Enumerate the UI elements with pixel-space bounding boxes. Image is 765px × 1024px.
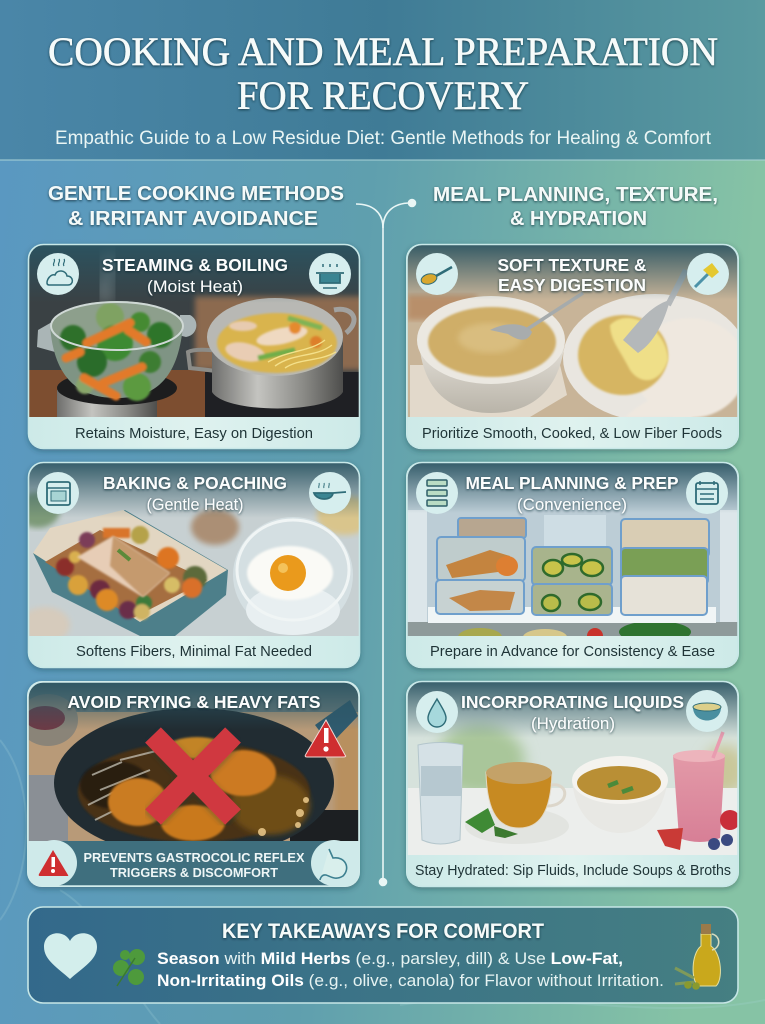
takeaway text: Non-Irritating Oils (e.g., olive, canola) for Flavor without Irritation. bbox=[157, 972, 664, 990]
photo: steamer and pot bbox=[29, 245, 365, 418]
card title: STEAMING & BOILING bbox=[102, 255, 288, 275]
caption: Prepare in Advance for Consistency & Ease bbox=[430, 643, 715, 660]
icon: pan bbox=[309, 472, 351, 514]
heading: KEY TAKEAWAYS FOR COMFORT bbox=[222, 920, 544, 943]
caption: Stay Hydrated: Sip Fluids, Include Soups & Broths bbox=[415, 862, 731, 879]
title bbox=[48, 29, 718, 118]
icon: steam cloud bbox=[37, 253, 79, 295]
card title bbox=[461, 692, 684, 733]
takeaway text: Season with Mild Herbs (e.g., parsley, dill) & Use Low-Fat, bbox=[157, 950, 623, 968]
panel: key takeaways bbox=[28, 907, 738, 1003]
photo: frying pan bbox=[28, 683, 358, 841]
card title: AVOID FRYING & HEAVY FATS bbox=[68, 692, 320, 712]
card title bbox=[466, 473, 679, 514]
icon: oven bbox=[37, 472, 79, 514]
card title: EASY DIGESTION bbox=[498, 275, 646, 295]
containers bbox=[436, 518, 709, 615]
icon: warning lower bbox=[39, 850, 68, 876]
heading: right column: & HYDRATION bbox=[510, 207, 647, 230]
header band bbox=[0, 0, 765, 161]
card title bbox=[102, 255, 288, 296]
panel: avoid frying bbox=[18, 681, 360, 887]
icon: water drop bbox=[416, 691, 458, 733]
warning text: TRIGGERS & DISCOMFORT bbox=[110, 865, 278, 880]
panel: incorporating liquids bbox=[406, 681, 747, 887]
panel: soft texture bbox=[406, 244, 747, 449]
panel: steaming and boiling bbox=[28, 244, 365, 449]
card title: INCORPORATING LIQUIDS bbox=[461, 692, 684, 712]
card title: (Convenience) bbox=[517, 496, 627, 514]
photo: baked dish and poached egg bbox=[29, 473, 359, 636]
icon: fork bbox=[687, 253, 729, 295]
warning text bbox=[84, 850, 305, 880]
caption: Prioritize Smooth, Cooked, & Low Fiber Foods bbox=[422, 425, 722, 442]
icon: red cross bbox=[153, 735, 233, 817]
icon: heart bbox=[44, 933, 97, 979]
warning text: PREVENTS GASTROCOLIC REFLEX bbox=[84, 850, 305, 865]
card title bbox=[498, 255, 647, 295]
caption: Retains Moisture, Easy on Digestion bbox=[75, 425, 313, 442]
photo: fridge containers bbox=[408, 472, 738, 636]
heading: left column bbox=[48, 182, 344, 230]
card title: SOFT TEXTURE & bbox=[498, 255, 647, 275]
card title: BAKING & POACHING bbox=[103, 473, 287, 493]
takeaway text bbox=[157, 950, 664, 990]
card title: (Moist Heat) bbox=[147, 278, 243, 296]
photo: drinks and soup bbox=[408, 704, 738, 855]
heading: left column: GENTLE COOKING METHODS bbox=[48, 182, 344, 205]
card title bbox=[103, 473, 287, 514]
icon: olive oil bottle bbox=[675, 924, 720, 990]
icon: stomach bbox=[320, 849, 347, 880]
icon: pot bbox=[309, 253, 351, 295]
icon: calendar bbox=[686, 472, 728, 514]
card title: (Hydration) bbox=[531, 715, 615, 733]
icon: warning upper bbox=[305, 720, 346, 757]
heading: left column: & IRRITANT AVOIDANCE bbox=[68, 207, 318, 230]
title: FOR RECOVERY bbox=[237, 73, 529, 118]
caption: Softens Fibers, Minimal Fat Needed bbox=[76, 643, 312, 660]
connector: centre divider bbox=[356, 200, 416, 886]
card title: (Gentle Heat) bbox=[146, 496, 244, 514]
title: COOKING AND MEAL PREPARATION bbox=[48, 29, 718, 74]
heading: right column bbox=[433, 183, 718, 230]
subtitle: Empathic Guide to a Low Residue Diet: Gentle Methods for Healing & Comfort bbox=[55, 127, 712, 149]
photo: puree, potato and rice bbox=[407, 245, 747, 422]
icon: soup bowl bbox=[686, 690, 728, 732]
icon: spoon bbox=[416, 253, 458, 295]
panel: meal planning bbox=[406, 462, 739, 668]
icon: parsley bbox=[113, 949, 145, 986]
panel: baking and poaching bbox=[16, 462, 373, 668]
card title: MEAL PLANNING & PREP bbox=[466, 473, 679, 493]
icon: stacked containers bbox=[416, 472, 458, 514]
heading: right column: MEAL PLANNING, TEXTURE, bbox=[433, 183, 718, 206]
